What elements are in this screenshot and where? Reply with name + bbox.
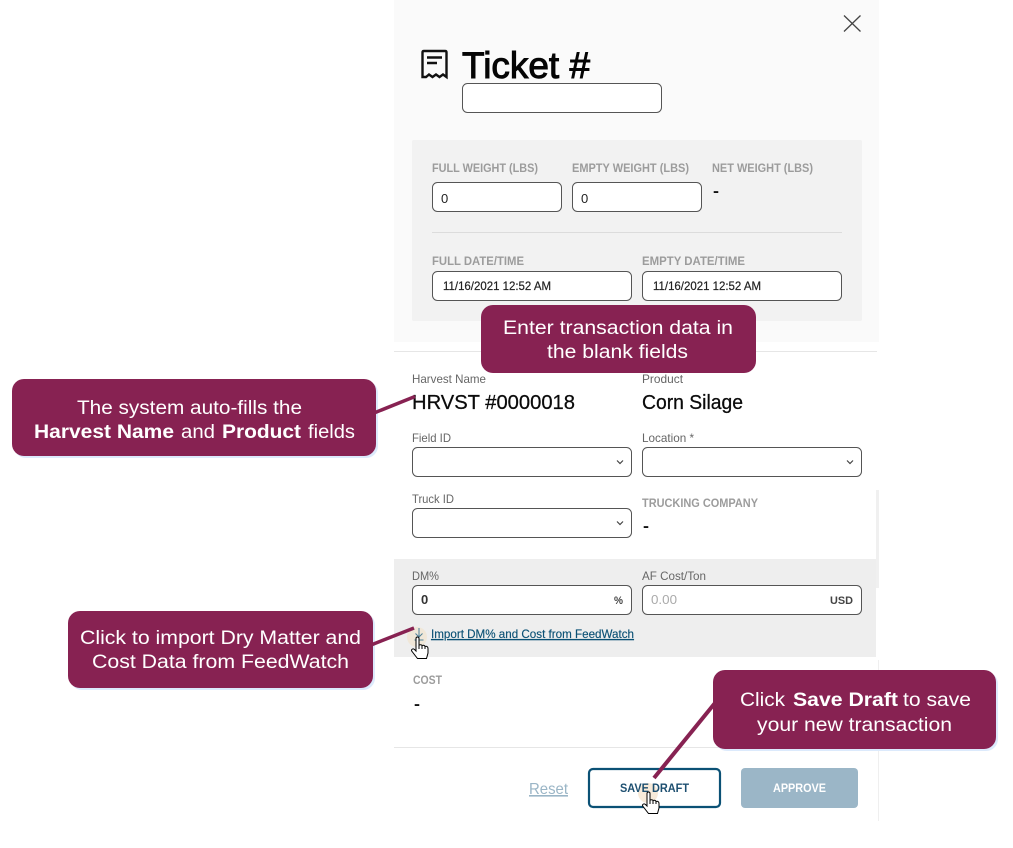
button: save draft xyxy=(589,769,720,807)
value: product: Corn Silage xyxy=(642,392,743,414)
panel: ticket header background xyxy=(394,0,879,342)
ticket number input xyxy=(462,84,662,112)
label: location: Location * xyxy=(642,431,694,445)
label: af cost: AF Cost/Ton xyxy=(642,569,706,583)
input: empty weight: 0 xyxy=(581,191,588,206)
callout: auto-fill xyxy=(12,379,415,458)
label: field id: Field ID xyxy=(412,431,451,445)
label: truck id: Truck ID xyxy=(412,492,454,506)
input: full weight xyxy=(432,182,562,212)
value: cost: - xyxy=(414,696,420,713)
callout: save draft: your new transaction xyxy=(757,715,952,736)
input: af cost: USD xyxy=(830,595,853,607)
input: empty date xyxy=(642,272,842,300)
input: af cost xyxy=(642,586,862,614)
label: full weight: FULL WEIGHT (LBS) xyxy=(432,161,538,175)
callout: auto-fill: Harvest Name xyxy=(34,422,174,443)
input: dm xyxy=(412,586,632,614)
select: location xyxy=(642,448,862,476)
callout: enter transaction data xyxy=(481,305,756,373)
label: product: Product xyxy=(642,372,684,386)
value: trucking company: - xyxy=(643,518,649,535)
callout: enter transaction data: the blank fields xyxy=(547,342,688,363)
icon: hand cursor save xyxy=(643,792,659,814)
callout: save draft: Click xyxy=(740,690,786,711)
label: full date: FULL DATE/TIME xyxy=(432,254,524,268)
input: dm: 0 xyxy=(421,592,428,607)
callout: save draft: Save Draft xyxy=(793,690,899,711)
icon: hand cursor import xyxy=(412,637,428,658)
callout: save draft: to save xyxy=(903,690,971,711)
input: empty date: 11/16/2021 12:52 AM xyxy=(653,279,761,293)
label: harvest name: Harvest Name xyxy=(412,372,486,386)
callout: save draft xyxy=(654,670,998,778)
value: net weight: - xyxy=(713,183,719,200)
callout: auto-fill: fields xyxy=(308,422,355,443)
select: field id xyxy=(412,448,632,476)
label: empty weight: EMPTY WEIGHT (LBS) xyxy=(572,161,689,175)
callout: auto-fill: and xyxy=(181,422,215,443)
button: save draft: SAVE DRAFT xyxy=(620,781,690,795)
input: full date xyxy=(432,272,632,300)
input: dm: % xyxy=(614,595,623,607)
select: truck id xyxy=(412,508,632,538)
button: approve: APPROVE xyxy=(773,781,826,795)
panel: weights and dates xyxy=(412,140,862,321)
icon: receipt xyxy=(422,51,446,77)
label: net weight: NET WEIGHT (LBS) xyxy=(712,161,813,175)
callout: auto-fill: Product xyxy=(222,422,302,443)
label: trucking company: TRUCKING COMPANY xyxy=(642,496,758,510)
value: harvest name: HRVST #0000018 xyxy=(412,392,575,414)
label: empty date: EMPTY DATE/TIME xyxy=(642,254,745,268)
icon: close xyxy=(844,16,860,32)
panel: dry matter and cost xyxy=(394,559,876,657)
callout: import from FeedWatch xyxy=(68,611,414,690)
link: reset: Reset xyxy=(529,781,569,798)
label: cost: COST xyxy=(413,673,443,687)
input: full weight: 0 xyxy=(441,191,448,206)
callout: enter transaction data: Enter transaction data in xyxy=(503,318,733,339)
callout: import from FeedWatch: Click to import Dry Matter and xyxy=(80,628,361,649)
button: approve xyxy=(741,768,858,808)
icon: import highlight and arrow xyxy=(407,627,427,647)
callout: import from FeedWatch: Cost Data from FeedWatch xyxy=(92,652,349,673)
input: full date: 11/16/2021 12:52 AM xyxy=(443,279,551,293)
input: af cost: 0.00 xyxy=(651,592,677,607)
link: import: Import DM% and Cost from FeedWatch xyxy=(431,627,634,641)
input: empty weight xyxy=(572,182,702,212)
callout: auto-fill: The system auto-fills the xyxy=(77,398,302,419)
label: dm: DM% xyxy=(412,569,439,583)
title: Ticket # xyxy=(462,45,590,86)
